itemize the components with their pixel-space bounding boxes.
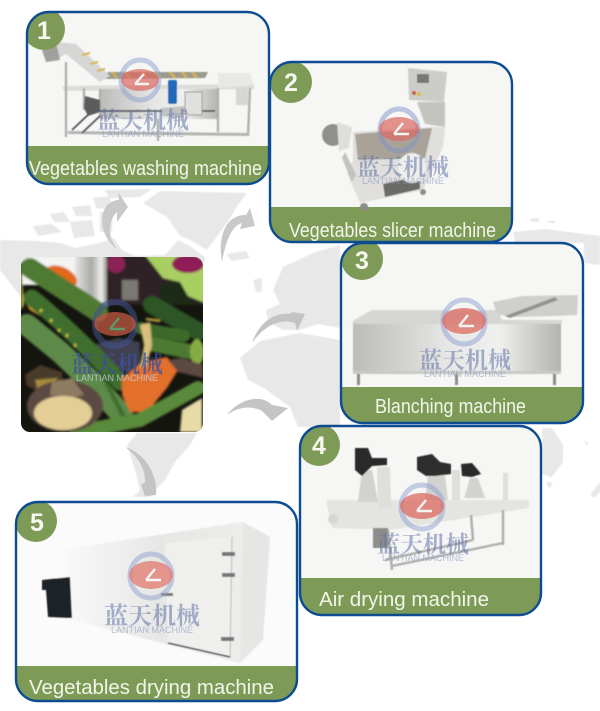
panel: step 5 vegetables drying machine: 5 bbox=[30, 509, 44, 537]
watermark bbox=[71, 302, 163, 383]
watermark: LANTIAN MACHINE bbox=[102, 129, 184, 139]
watermark: LANTIAN MACHINE bbox=[382, 553, 464, 563]
watermark bbox=[97, 60, 189, 139]
watermark bbox=[419, 300, 511, 379]
watermark bbox=[377, 485, 469, 563]
watermark: 蓝天机械 bbox=[377, 531, 469, 557]
image: slicer machine bbox=[322, 68, 447, 211]
watermark: 蓝天机械 bbox=[357, 154, 449, 180]
panel: step 3 blanching machine bbox=[340, 238, 584, 425]
panel: step 1 washing machine: 1 bbox=[37, 17, 51, 45]
image: drying room bbox=[42, 522, 270, 663]
image: air drying machine bbox=[326, 448, 529, 570]
panel: step 1 washing machine bbox=[23, 8, 270, 186]
arrow: product to washing machine bbox=[102, 192, 128, 250]
image: blanching machine bbox=[352, 295, 578, 385]
watermark bbox=[357, 109, 449, 186]
caption: Blanching machine bbox=[375, 396, 526, 418]
arrow: blanching to air drying bbox=[227, 399, 288, 421]
panel: step 4 air drying machine bbox=[298, 424, 542, 616]
caption: Vegetables slicer machine bbox=[289, 220, 496, 242]
panel: step 3 blanching machine: 3 bbox=[355, 247, 369, 275]
caption: Vegetables washing machine bbox=[29, 158, 262, 180]
watermark: LANTIAN MACHINE bbox=[424, 369, 506, 379]
watermark: LANTIAN MACHINE bbox=[111, 625, 193, 635]
panel: step 2 slicer machine bbox=[269, 61, 513, 244]
arrow: slicer to blanching bbox=[252, 312, 305, 343]
image: washing machine bbox=[42, 42, 255, 141]
watermark: 蓝天机械 bbox=[97, 107, 189, 133]
watermark: LANTIAN MACHINE bbox=[76, 373, 158, 383]
caption: Air drying machine bbox=[319, 589, 489, 611]
arrow: washing to slicer bbox=[221, 208, 255, 262]
world map background bbox=[0, 189, 600, 498]
watermark: 蓝天机械 bbox=[419, 347, 511, 373]
panel: step 4 air drying machine: 4 bbox=[312, 432, 326, 460]
panel: centre photo of vegetable chips bbox=[21, 255, 205, 432]
panel: step 5 vegetables drying machine bbox=[15, 500, 298, 703]
arrow: air drying to vegetables drying bbox=[125, 447, 156, 496]
panel: step 2 slicer machine: 2 bbox=[284, 69, 298, 97]
caption: Vegetables drying machine bbox=[29, 677, 274, 699]
watermark: 蓝天机械 bbox=[71, 351, 163, 377]
watermark bbox=[104, 554, 200, 635]
watermark: LANTIAN MACHINE bbox=[362, 176, 444, 186]
watermark: 蓝天机械 bbox=[104, 602, 200, 630]
